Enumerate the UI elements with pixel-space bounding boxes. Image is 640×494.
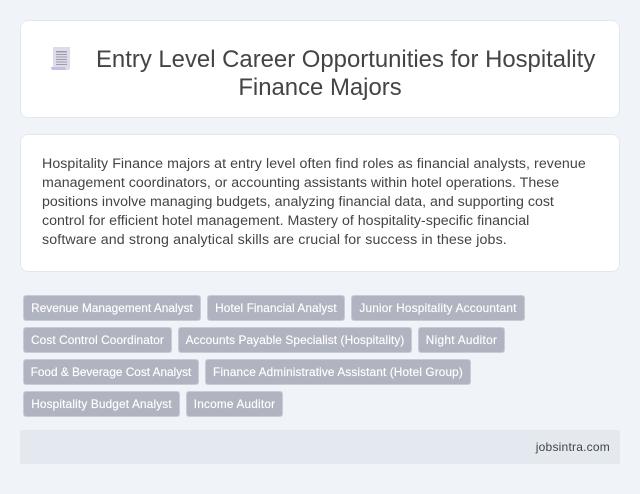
description text: software and strong analytical skills are crucial for success in these jobs. [42, 232, 507, 248]
footer bar [20, 430, 620, 464]
tag: Accounts Payable Specialist: Accounts Payable Specialist (Hospitality) [186, 333, 404, 347]
tag: Hotel Financial Analyst [207, 295, 345, 321]
title line 1: Entry Level Career Opportunities for Hospitality [96, 46, 595, 73]
tag: Revenue Management Analyst [23, 295, 201, 321]
panel: header card [20, 20, 620, 118]
description text: Hospitality Finance majors at entry level often find roles as financial analysts, revenue [42, 156, 586, 172]
tag: Junior Hospitality Accountant: Junior Hospitality Accountant [359, 301, 517, 315]
tag: Hospitality Budget Analyst [23, 391, 180, 417]
tag: Accounts Payable Specialist [178, 327, 412, 353]
tag: Hospitality Budget Analyst: Hospitality Budget Analyst [31, 397, 172, 411]
tag: Finance Administrative Assistant: Finance Administrative Assistant (Hotel Group) [213, 365, 463, 379]
tag: Food and Beverage Cost Analyst: Food & Beverage Cost Analyst [31, 365, 191, 379]
panel: description card [20, 134, 620, 272]
description text [42, 156, 586, 248]
description text: control for efficient hotel management. Mastery of hospitality-specific financial [42, 213, 529, 229]
tag: Junior Hospitality Accountant [351, 295, 525, 321]
description text: positions involve managing budgets, analyzing financial data, and supporting cost [42, 194, 554, 210]
tag: Night Auditor [418, 327, 505, 353]
tag: Income Auditor [186, 391, 283, 417]
title line 2: Finance Majors [238, 74, 402, 101]
tag: Cost Control Coordinator [23, 327, 172, 353]
icon: document receipt [51, 47, 70, 70]
footer source text: jobsintra.com [536, 440, 610, 454]
tag: Revenue Management Analyst: Revenue Management Analyst [31, 301, 193, 315]
tag: Finance Administrative Assistant [205, 359, 471, 385]
tag: Income Auditor: Income Auditor [194, 397, 275, 411]
description text: management coordinators, or accounting assistants within hotel operations. These [42, 175, 559, 191]
tag: Cost Control Coordinator: Cost Control Coordinator [31, 333, 164, 347]
tag: Night Auditor: Night Auditor [426, 333, 497, 347]
tag: Food and Beverage Cost Analyst [23, 359, 199, 385]
tag: Hotel Financial Analyst: Hotel Financial Analyst [215, 301, 337, 315]
